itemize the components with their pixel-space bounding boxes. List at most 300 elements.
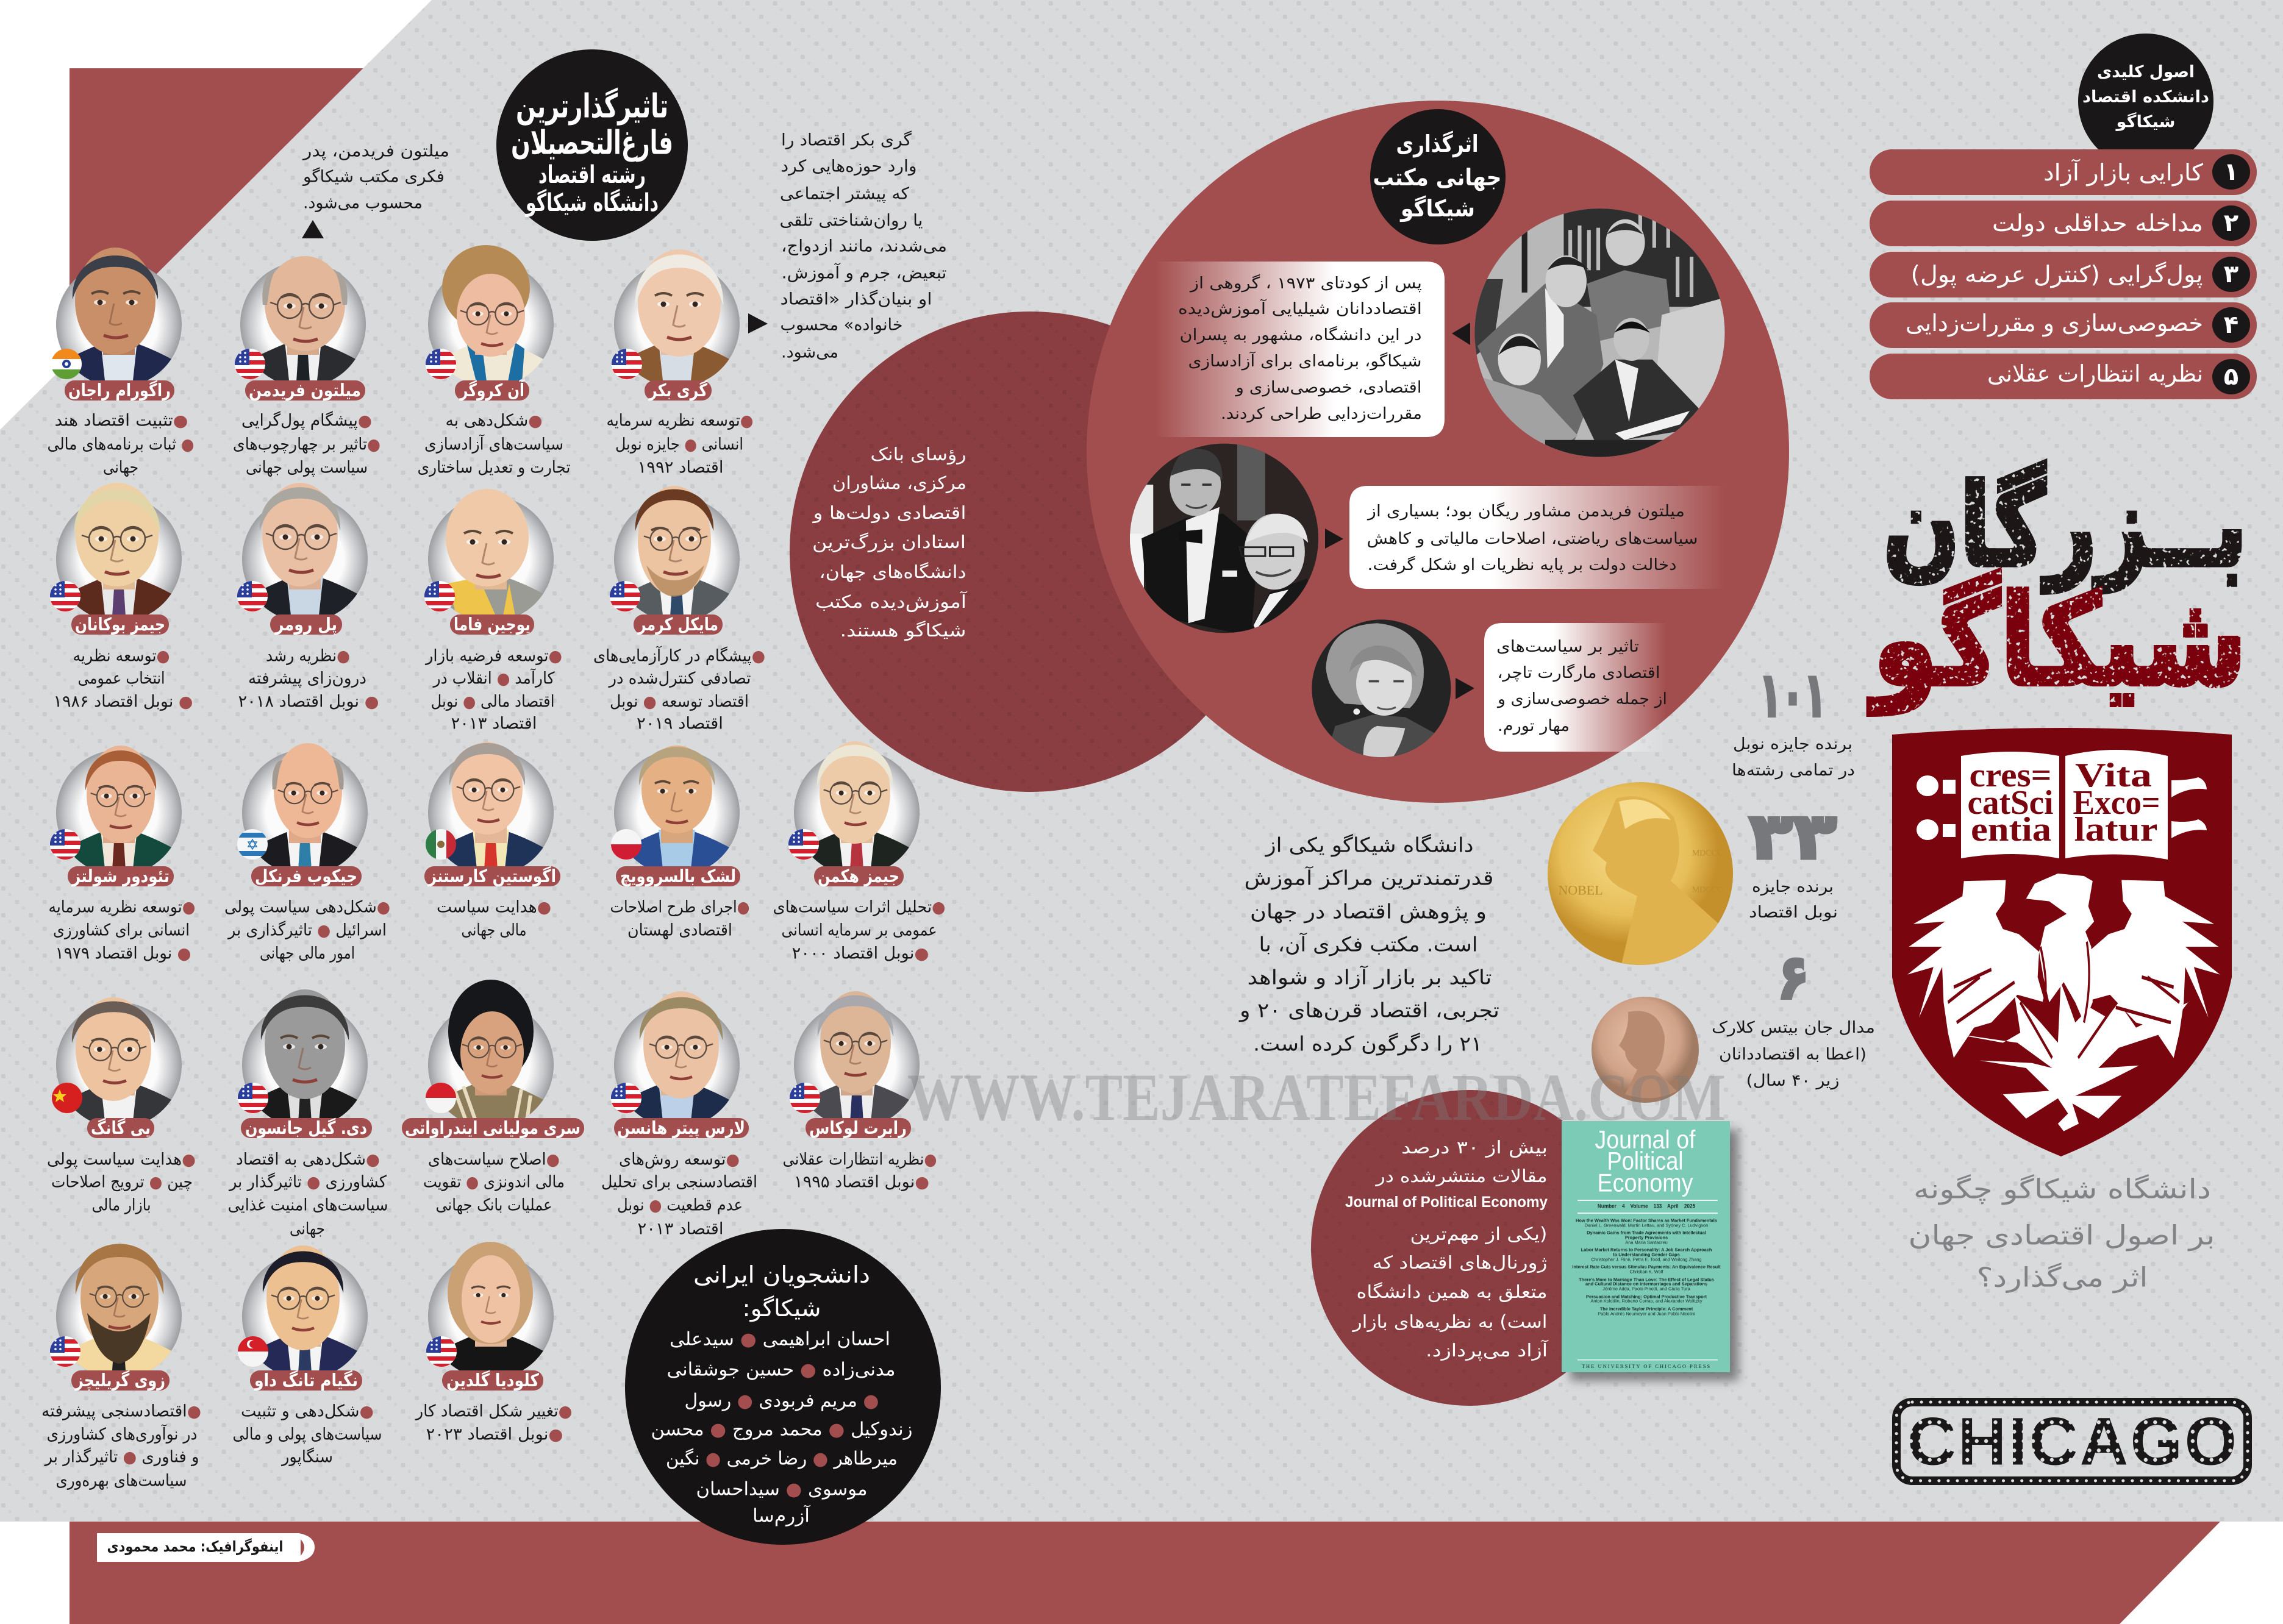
name label: لشک بالسروویچ <box>620 866 736 886</box>
open book with motto: Vita <box>2075 757 2152 794</box>
achievements <box>601 1150 757 1239</box>
callout: Friedman and Reagan <box>1349 486 1724 589</box>
achievements: ●تثبیت اقتصاد هند <box>55 411 188 430</box>
flag <box>426 1336 457 1368</box>
flag <box>51 349 82 380</box>
panel: Iranian students: موسوی ● سیداحسان <box>696 1479 867 1500</box>
portrait <box>790 991 924 1138</box>
journal cover <box>1562 1121 1738 1381</box>
card: Sri Mulyani Indrawati <box>402 980 584 1214</box>
note: Gary Becker: گری بکر اقتصاد را <box>781 130 912 150</box>
open book with motto: cres= <box>1970 757 2051 794</box>
note: Gary Becker: خانواده» محسوب <box>781 316 902 334</box>
name label: آن کروگر <box>459 379 525 401</box>
principle 1: ۱ <box>2224 158 2238 186</box>
phoenix emblem <box>1907 874 2220 1131</box>
stat: 6 Clark medals: مدال جان بیتس کلارک <box>1712 1019 1875 1037</box>
portrait <box>428 245 554 380</box>
achievements: انتخاب عمومی <box>78 669 165 688</box>
achievements <box>49 897 195 963</box>
heading: key principles: شیکاگو <box>2115 112 2176 132</box>
note: Friedman father of the school <box>302 141 449 212</box>
note: Gary Becker: وارد حوزه‌هایی کرد <box>781 157 917 176</box>
open book with motto: latur <box>2074 811 2157 849</box>
portrait <box>52 483 186 632</box>
callout: Thatcher: از جمله خصوصی‌سازی و <box>1496 690 1667 708</box>
list: key principles <box>1870 149 2257 399</box>
card: Anne Krueger <box>417 245 571 477</box>
achievements: ●نوبل اقتصاد ۲۰۲۳ <box>426 1425 563 1444</box>
achievements: بازار مالی <box>91 1196 151 1214</box>
name label: جیمز هکمن <box>818 866 899 886</box>
achievements: چین ● ترویج اصلاحات <box>51 1173 193 1191</box>
text: university overview: دانشگاه شیکاگو یکی از <box>1264 833 1473 857</box>
callout: Chicago Boys: در این دانشگاه، مشهور به پسران <box>1179 326 1422 344</box>
name label: سری مولیانی ایندراواتی <box>405 1117 581 1138</box>
card: Eugene Fama <box>424 489 562 733</box>
achievements: ●نوبل اقتصاد ۱۹۹۵ <box>794 1173 929 1191</box>
text: university overview: ۲۱ را دگرگون کرده است. <box>1253 1031 1482 1056</box>
achievements: سیاست‌های امنیت غذایی <box>228 1196 388 1214</box>
journal cover: Christian K. Wolf <box>1630 1269 1663 1274</box>
principle 1 <box>1870 149 2257 195</box>
achievements: اسرائیل ● تاثیرگذاری بر <box>227 921 387 940</box>
callout: Friedman and Reagan: دخالت دولت بر پایه نظریات او شکل گرفت. <box>1367 555 1677 574</box>
name label: کلودیا گلدین <box>446 1370 539 1391</box>
portrait <box>790 741 924 886</box>
achievements: و فناوری ● تاثیرگذار بر <box>44 1447 199 1467</box>
flag <box>52 1083 82 1113</box>
achievements: جهانی <box>103 458 138 477</box>
achievements <box>47 1150 196 1214</box>
achievements: مالی جهانی <box>461 921 527 940</box>
name label: زوی گریلیچز <box>74 1370 165 1391</box>
flag <box>426 349 456 380</box>
achievements: ●شکل‌دهی و تثبیت <box>241 1402 374 1420</box>
journal cover: Political <box>1607 1146 1683 1175</box>
achievements: ● نوبل اقتصاد ۱۹۷۹ <box>55 944 191 963</box>
text: journal share: آزاد می‌پردازد. <box>1426 1339 1549 1361</box>
heading: global influence: شیکاگو <box>1399 195 1475 222</box>
note: Gary Becker: می‌شود. <box>781 343 838 362</box>
achievements: ●تغییر شکل اقتصاد کار <box>415 1402 572 1420</box>
note: Gary Becker <box>779 130 947 362</box>
card: Agustin Carstens <box>424 742 560 940</box>
text: university overview <box>1238 833 1499 1056</box>
portrait <box>610 486 744 632</box>
achievements: انسانی برای کشاورزی <box>53 921 190 940</box>
achievements: ●نظریه انتظارات عقلانی <box>783 1150 937 1169</box>
credit tag <box>97 1533 315 1562</box>
principle 5 <box>1870 354 2257 399</box>
achievements: ●هدایت سیاست <box>437 897 551 917</box>
principle 5: نظریه انتظارات عقلانی <box>1987 360 2203 388</box>
arrow: left to callout <box>1452 322 1470 345</box>
open book with motto: Exco= <box>2073 784 2160 822</box>
text: university overview: قدرتمندترین مراکز آموزش <box>1244 866 1494 890</box>
heading: most influential graduates: تاثیرگذارترین <box>516 87 668 126</box>
text: central bankers: استادان بزرگ‌ترین <box>812 532 966 552</box>
flag <box>610 581 640 613</box>
heading: most influential graduates <box>496 49 688 241</box>
achievements: اقتصاد ۲۰۱۹ <box>637 714 723 733</box>
flag <box>235 349 265 380</box>
achievements <box>415 1402 572 1444</box>
text: university overview: است. مکتب فکری آن، با <box>1259 933 1478 956</box>
text: question subtitle <box>1909 1174 2215 1294</box>
stat: 33 economics laureates <box>1749 799 1838 922</box>
achievements <box>54 646 193 711</box>
text: journal share: Journal of Political Economy <box>1345 1194 1548 1211</box>
callout: Thatcher <box>1484 623 1667 752</box>
card: James Buchanan <box>50 483 193 711</box>
achievements: ●اصلاح سیاست‌های <box>428 1150 560 1169</box>
portrait <box>424 489 558 632</box>
panel: Iranian students: آزرم‌سا <box>752 1505 811 1526</box>
principle 2: مداخله حداقلی دولت <box>1992 210 2203 237</box>
portrait <box>238 1245 372 1389</box>
stat: 101 Nobel laureates: در تمامی رشته‌ها <box>1732 761 1855 780</box>
panel: Iranian students: دانشجویان ایرانی <box>693 1261 870 1289</box>
book clasps <box>1917 775 2207 840</box>
card: Paul Romer <box>237 483 379 711</box>
icon: Nobel medal: NOBEL <box>1558 883 1603 897</box>
journal cover: Anton Kolotilin, Roberto Corrao, and Alexander Wolitzky <box>1590 1298 1702 1303</box>
text: journal share: است) به نظریه‌های بازار <box>1351 1311 1548 1332</box>
achievements <box>47 411 194 477</box>
principle 4 <box>1870 302 2257 348</box>
stat: 33 economics laureates: ۳۳ <box>1749 799 1837 874</box>
name label: یی گانگ <box>91 1117 151 1138</box>
achievements: ●توسعه نظریه <box>73 646 170 666</box>
principle 4: ۴ <box>2224 311 2238 339</box>
card: Zvi Griliches <box>41 1244 201 1490</box>
text: central bankers: مرکزی، مشاوران <box>832 472 966 493</box>
journal cover: Pablo Andrés Neumeyer and Juan Pablo Nicolini <box>1598 1311 1695 1317</box>
portrait <box>424 742 558 886</box>
note: Gary Becker: می‌شدند، مانند ازدواج، <box>781 237 947 256</box>
callout: Friedman and Reagan: میلتون فریدمن مشاور ریگان بود؛ بسیاری از <box>1367 502 1685 521</box>
achievements <box>437 897 551 940</box>
achievements <box>593 646 765 733</box>
card: Raghuram Rajan <box>47 248 194 477</box>
achievements: ● نوبل اقتصاد ۱۹۸۶ <box>54 693 193 711</box>
text: journal share: مقالات منتشرشده در <box>1374 1166 1548 1186</box>
callout: Thatcher: اقتصادی مارگارت تاچر، <box>1498 663 1660 682</box>
flag <box>790 1083 820 1114</box>
arrow: right to Thatcher note <box>1456 678 1474 699</box>
name label: جیمز بوکانان <box>75 614 165 635</box>
text: journal share: (یکی از مهم‌ترین <box>1410 1223 1548 1245</box>
text: central bankers: دانشگاه‌های جهان، <box>820 561 966 582</box>
principle 2 <box>1870 201 2257 246</box>
credit tag: اینفوگرافیک: محمد محمودی <box>107 1538 283 1555</box>
portrait <box>52 746 186 886</box>
text: central bankers: رؤسای بانک <box>871 444 966 465</box>
principle 1: کارایی بازار آزاد <box>2043 158 2204 186</box>
card: Leszek Balcerowicz <box>610 746 750 940</box>
name label: یوجین فاما <box>454 614 531 635</box>
achievements: سنگاپور <box>280 1447 333 1467</box>
flag <box>611 829 641 860</box>
achievements: ●توسعه نظریه سرمایه <box>49 897 195 917</box>
flag <box>788 829 819 861</box>
flag <box>50 581 80 613</box>
achievements: اقتصاد ۲۰۱۳ <box>451 714 537 733</box>
stat: 6 Clark medals: (اعطا به اقتصاددانان <box>1719 1045 1867 1064</box>
note: Friedman father of the school: محسوب می‌شود. <box>303 194 423 212</box>
stat: 101 Nobel laureates: ۱۰۱ <box>1759 660 1826 730</box>
achievements: در نوآوری‌های کشاورزی <box>46 1424 198 1444</box>
flag <box>238 1083 268 1114</box>
achievements: ●شکل‌دهی به <box>445 411 543 430</box>
text: university overview: تاکید بر بازار آزاد و شواهد <box>1248 966 1492 989</box>
card: Robert Lucas <box>783 991 937 1191</box>
journal cover: Ana Maria Santacreu <box>1625 1240 1668 1245</box>
journal cover: Labor Market Returns to Personality: A Job Search Approach <box>1581 1247 1712 1252</box>
achievements: مالی اندونزی ● تقویت <box>423 1173 565 1191</box>
icon: Nobel medal: MDCCC <box>1692 849 1723 858</box>
achievements <box>228 1150 388 1239</box>
flag <box>426 829 457 860</box>
text: journal share: ژورنال‌های اقتصاد که <box>1372 1252 1548 1273</box>
panel: Iranian students: میرطاهر ● رضا خرمی ● نگین <box>666 1448 898 1469</box>
achievements <box>41 1402 201 1490</box>
card: Milton Friedman <box>233 256 381 477</box>
name label: میلتون فریدمن <box>249 380 361 401</box>
text: journal share: متعلق به همین دانشگاه <box>1356 1281 1548 1302</box>
callout: Friedman and Reagan: سیاست‌های ریاضتی، اصلاحات مالیاتی و کاهش <box>1367 530 1698 548</box>
card: Jacob Frenkel <box>224 743 390 963</box>
text: journal share: بیش از ۳۰ درصد <box>1401 1137 1548 1158</box>
principle 2: ۲ <box>2224 209 2238 237</box>
icon: Clark medal <box>1592 997 1699 1103</box>
heading: most influential graduates: دانشگاه شیکاگو <box>525 188 659 217</box>
heading: global influence <box>1370 109 1506 244</box>
card: D. Gale Johnson <box>228 989 388 1239</box>
journal cover: There's More to Marriage Than Love: The Effect of Legal Status <box>1579 1277 1714 1283</box>
achievements: ●اقتصادسنجی پیشرفته <box>41 1402 201 1420</box>
note: Gary Becker: او بنیان‌گذار «اقتصاد <box>781 289 932 308</box>
achievements: ●پیشگام پول‌گرایی <box>241 411 372 430</box>
arrow: up to Friedman note <box>302 220 324 238</box>
icon: Nobel medal <box>1548 782 1733 975</box>
achievements: انسانی ● جایزه نوبل <box>615 435 743 454</box>
achievements: عمومی بر سرمایه انسانی <box>782 921 937 940</box>
achievements: عدم قطعیت ● نوبل <box>617 1196 743 1214</box>
callout: Chicago Boys: اقتصادی، خصوصی‌سازی و <box>1234 379 1422 397</box>
text: question subtitle: بر اصول اقتصادی جهان <box>1909 1220 2215 1251</box>
callout: Chicago Boys: اقتصاددانان شیلیایی آموزش‌دیده <box>1178 299 1422 318</box>
heading: global influence: اثرگذاری <box>1396 130 1478 157</box>
circle: global influence panel <box>1087 101 1789 803</box>
callout: Thatcher: مهار تورم. <box>1498 717 1570 735</box>
name label: تئودور شولتز <box>71 866 170 886</box>
achievements: ●تاثیر بر چهارچوب‌های <box>233 435 381 454</box>
text: central bankers: آموزش‌دیده مکتب <box>815 591 968 612</box>
portrait <box>52 248 186 397</box>
achievements <box>423 1150 565 1214</box>
achievements <box>773 897 945 963</box>
text: question subtitle: دانشگاه شیکاگو چگونه <box>1913 1174 2211 1205</box>
journal cover: Interest Rate Cuts versus Stimulus Payments: An Equivalence Result <box>1572 1264 1721 1269</box>
panel: Iranian students: ● مریم فربودی ● رسول <box>684 1390 879 1412</box>
circle: central bankers panel <box>790 312 1270 792</box>
panel: Iranian students: مدنی‌زاده ● حسین جوشقانی <box>667 1359 895 1380</box>
achievements: ●توسعه روش‌های <box>619 1150 740 1169</box>
achievements: ●توسعه فرضیه بازار <box>424 646 562 666</box>
portrait <box>238 989 372 1138</box>
achievements: امور مالی جهانی <box>260 944 355 963</box>
name label: لارس پیتر هانسن <box>617 1117 745 1139</box>
journal cover: to Understanding Gender Gaps <box>1613 1252 1680 1257</box>
title <box>1868 460 2248 714</box>
journal cover: Christopher J. Flinn, Petra E. Todd, and Weilong Zhang <box>1592 1257 1701 1262</box>
journal cover: THE UNIVERSITY OF CHICAGO PRESS <box>1582 1363 1711 1369</box>
callout: Chicago Boys: شیکاگو، برنامه‌ای برای آزادسازی <box>1188 351 1422 371</box>
portrait <box>238 483 372 632</box>
callout: Thatcher: تاثیر بر سیاست‌های <box>1496 638 1639 656</box>
card: Theodore Schultz <box>49 746 195 963</box>
callout: Chicago Boys: پس از کودتای ۱۹۷۳ ، گروهی از <box>1189 274 1422 293</box>
name label: پل رومر <box>274 614 337 635</box>
heading: key principles: دانشکده اقتصاد <box>2082 88 2209 106</box>
text: central bankers: شیکاگو هستند. <box>840 620 966 641</box>
name label: مایکل کرمر <box>637 614 718 635</box>
flag <box>237 581 268 613</box>
circle: journal note <box>1311 1090 1627 1406</box>
card: Michael Kremer <box>593 486 765 733</box>
journal cover: Economy <box>1598 1168 1693 1197</box>
panel: Iranian students <box>625 1229 941 1545</box>
note: Friedman father of the school: میلتون فریدمن، پدر <box>302 141 449 161</box>
flag <box>611 1083 641 1114</box>
marquee: CHICAGO: CHICAGO <box>1907 1405 2237 1479</box>
heading: key principles: اصول کلیدی <box>2097 62 2195 82</box>
heading: most influential graduates: فارغ‌التحصیلان <box>511 123 673 162</box>
text: university overview: تجربی، اقتصاد قرن‌های ۲۰ و <box>1238 999 1499 1022</box>
portrait <box>52 1244 186 1389</box>
name label: رابرت لوکاس <box>809 1117 907 1138</box>
achievements <box>224 897 390 963</box>
achievements: ●هدایت سیاست پولی <box>47 1150 196 1169</box>
portrait <box>424 980 558 1138</box>
achievements: ●پیشگام در کارآزمایی‌های <box>593 646 765 666</box>
name label: جیکوب فرنکل <box>255 866 357 886</box>
flag <box>50 829 80 861</box>
photo: Chicago Boys group <box>1470 203 1732 462</box>
portrait <box>424 1242 558 1389</box>
achievements: اقتصاد ۲۰۱۳ <box>638 1219 723 1239</box>
name label: اگوستین کارستنز <box>427 866 556 886</box>
card: Yi Gang <box>47 997 196 1214</box>
text: university overview: و پژوهش اقتصاد در جهان <box>1250 900 1487 923</box>
panel: Iranian students: احسان ابراهیمی ● سیدعلی <box>670 1329 890 1350</box>
flag <box>50 1336 80 1368</box>
card: Ngiam Tong Dow <box>233 1245 382 1467</box>
text: journal share <box>1345 1137 1549 1361</box>
callout: Chicago Boys: مقررات‌زدایی طراحی کردند. <box>1221 405 1422 423</box>
flag <box>426 1083 456 1113</box>
achievements <box>783 1150 937 1191</box>
card: James Heckman <box>773 741 945 963</box>
stat: 6 Clark medals: زیر ۴۰ سال) <box>1746 1072 1839 1090</box>
principle 3: پول‌گرایی (کنترل عرضه پول) <box>1911 261 2203 288</box>
callout: Chicago Boys <box>1156 262 1445 437</box>
journal cover: Daniel L. Greenwald, Martin Lettau, and Sydney C. Ludvigson <box>1585 1223 1708 1228</box>
achievements: درون‌زای پیشرفته <box>248 669 366 688</box>
achievements: کارآمد ● انقلاب در <box>432 668 555 688</box>
portrait <box>238 743 372 886</box>
text: question subtitle: اثر می‌گذارد؟ <box>1977 1262 2148 1294</box>
open book with motto: entia <box>1971 811 2051 849</box>
journal cover: Journal of <box>1595 1125 1696 1153</box>
achievements: سیاست پولی جهانی <box>246 458 368 477</box>
portrait <box>240 256 366 380</box>
achievements: اقتصاد ۱۹۹۲ <box>638 458 723 477</box>
achievements: اقتصادی لهستان <box>627 921 732 940</box>
card: Gary Becker <box>606 249 754 477</box>
flag <box>424 581 455 613</box>
stat: 101 Nobel laureates: برنده جایزه نوبل <box>1733 735 1852 753</box>
achievements <box>238 646 379 711</box>
achievements: ●شکل‌دهی به اقتصاد <box>236 1150 380 1169</box>
text: central bankers <box>812 444 968 641</box>
portrait <box>614 249 740 382</box>
journal cover: Persuasion and Matching: Optimal Productive Transport <box>1586 1294 1707 1300</box>
note: Friedman father of the school: فکری مکتب شیکاگو <box>302 167 445 187</box>
achievements: ●نوبل اقتصاد ۲۰۰۰ <box>791 944 929 963</box>
stat: 6 Clark medals <box>1712 941 1875 1090</box>
achievements: ●تحلیل اثرات سیاست‌های <box>773 897 945 917</box>
achievements: ● نوبل اقتصاد ۲۰۱۸ <box>238 693 379 711</box>
photo: Margaret Thatcher <box>1310 616 1454 760</box>
journal cover: Number 4 Volume 133 April 2025 <box>1598 1203 1696 1209</box>
journal cover: and Cultural Distance on Intermarriages and Separations <box>1585 1281 1707 1286</box>
principle 3: ۳ <box>2224 260 2238 288</box>
name label: دی. گیل جانسون <box>245 1117 367 1138</box>
portrait <box>610 991 744 1138</box>
principle 5: ۵ <box>2224 363 2238 391</box>
achievements <box>424 646 562 733</box>
achievements <box>233 411 381 477</box>
achievements <box>233 1402 382 1467</box>
card: Lars Peter Hansen <box>601 991 757 1239</box>
journal cover: How the Wealth Was Won: Factor Shares as Market Fundamentals <box>1576 1218 1717 1223</box>
achievements: جهانی <box>290 1219 325 1239</box>
note: Gary Becker: تبعیض، جرم و آموزش. <box>782 263 946 283</box>
achievements: عملیات بانک جهانی <box>435 1196 552 1214</box>
stat: 33 economics laureates: برنده جایزه <box>1752 878 1834 896</box>
journal cover: The Incredible Taylor Principle: A Comment <box>1600 1306 1693 1312</box>
stat: 33 economics laureates: نوبل اقتصاد <box>1749 903 1838 922</box>
name label: نگیام تانگ داو <box>253 1370 358 1391</box>
achievements <box>606 411 754 477</box>
journal cover: Dynamic Gains from Trade Agreements with Intellectual <box>1587 1230 1706 1235</box>
flag <box>612 349 642 380</box>
journal cover: Jérôme Adda, Paolo Pinotti, and Giulia Tura <box>1602 1286 1691 1291</box>
journal cover: Property Provisions <box>1625 1235 1668 1240</box>
panel: Iranian students: شیکاگو: <box>743 1295 821 1322</box>
open book with motto: catSci <box>1967 784 2054 822</box>
arrow: right to Becker note <box>748 313 768 333</box>
principle 3 <box>1870 252 2257 297</box>
name label: راگورام راجان <box>68 380 171 401</box>
crest: University of Chicago shield <box>1892 728 2232 1156</box>
text: central bankers: اقتصادی دولت‌ها و <box>812 502 966 523</box>
portrait <box>610 746 744 886</box>
achievements: ●شکل‌دهی سیاست پولی <box>224 897 390 917</box>
